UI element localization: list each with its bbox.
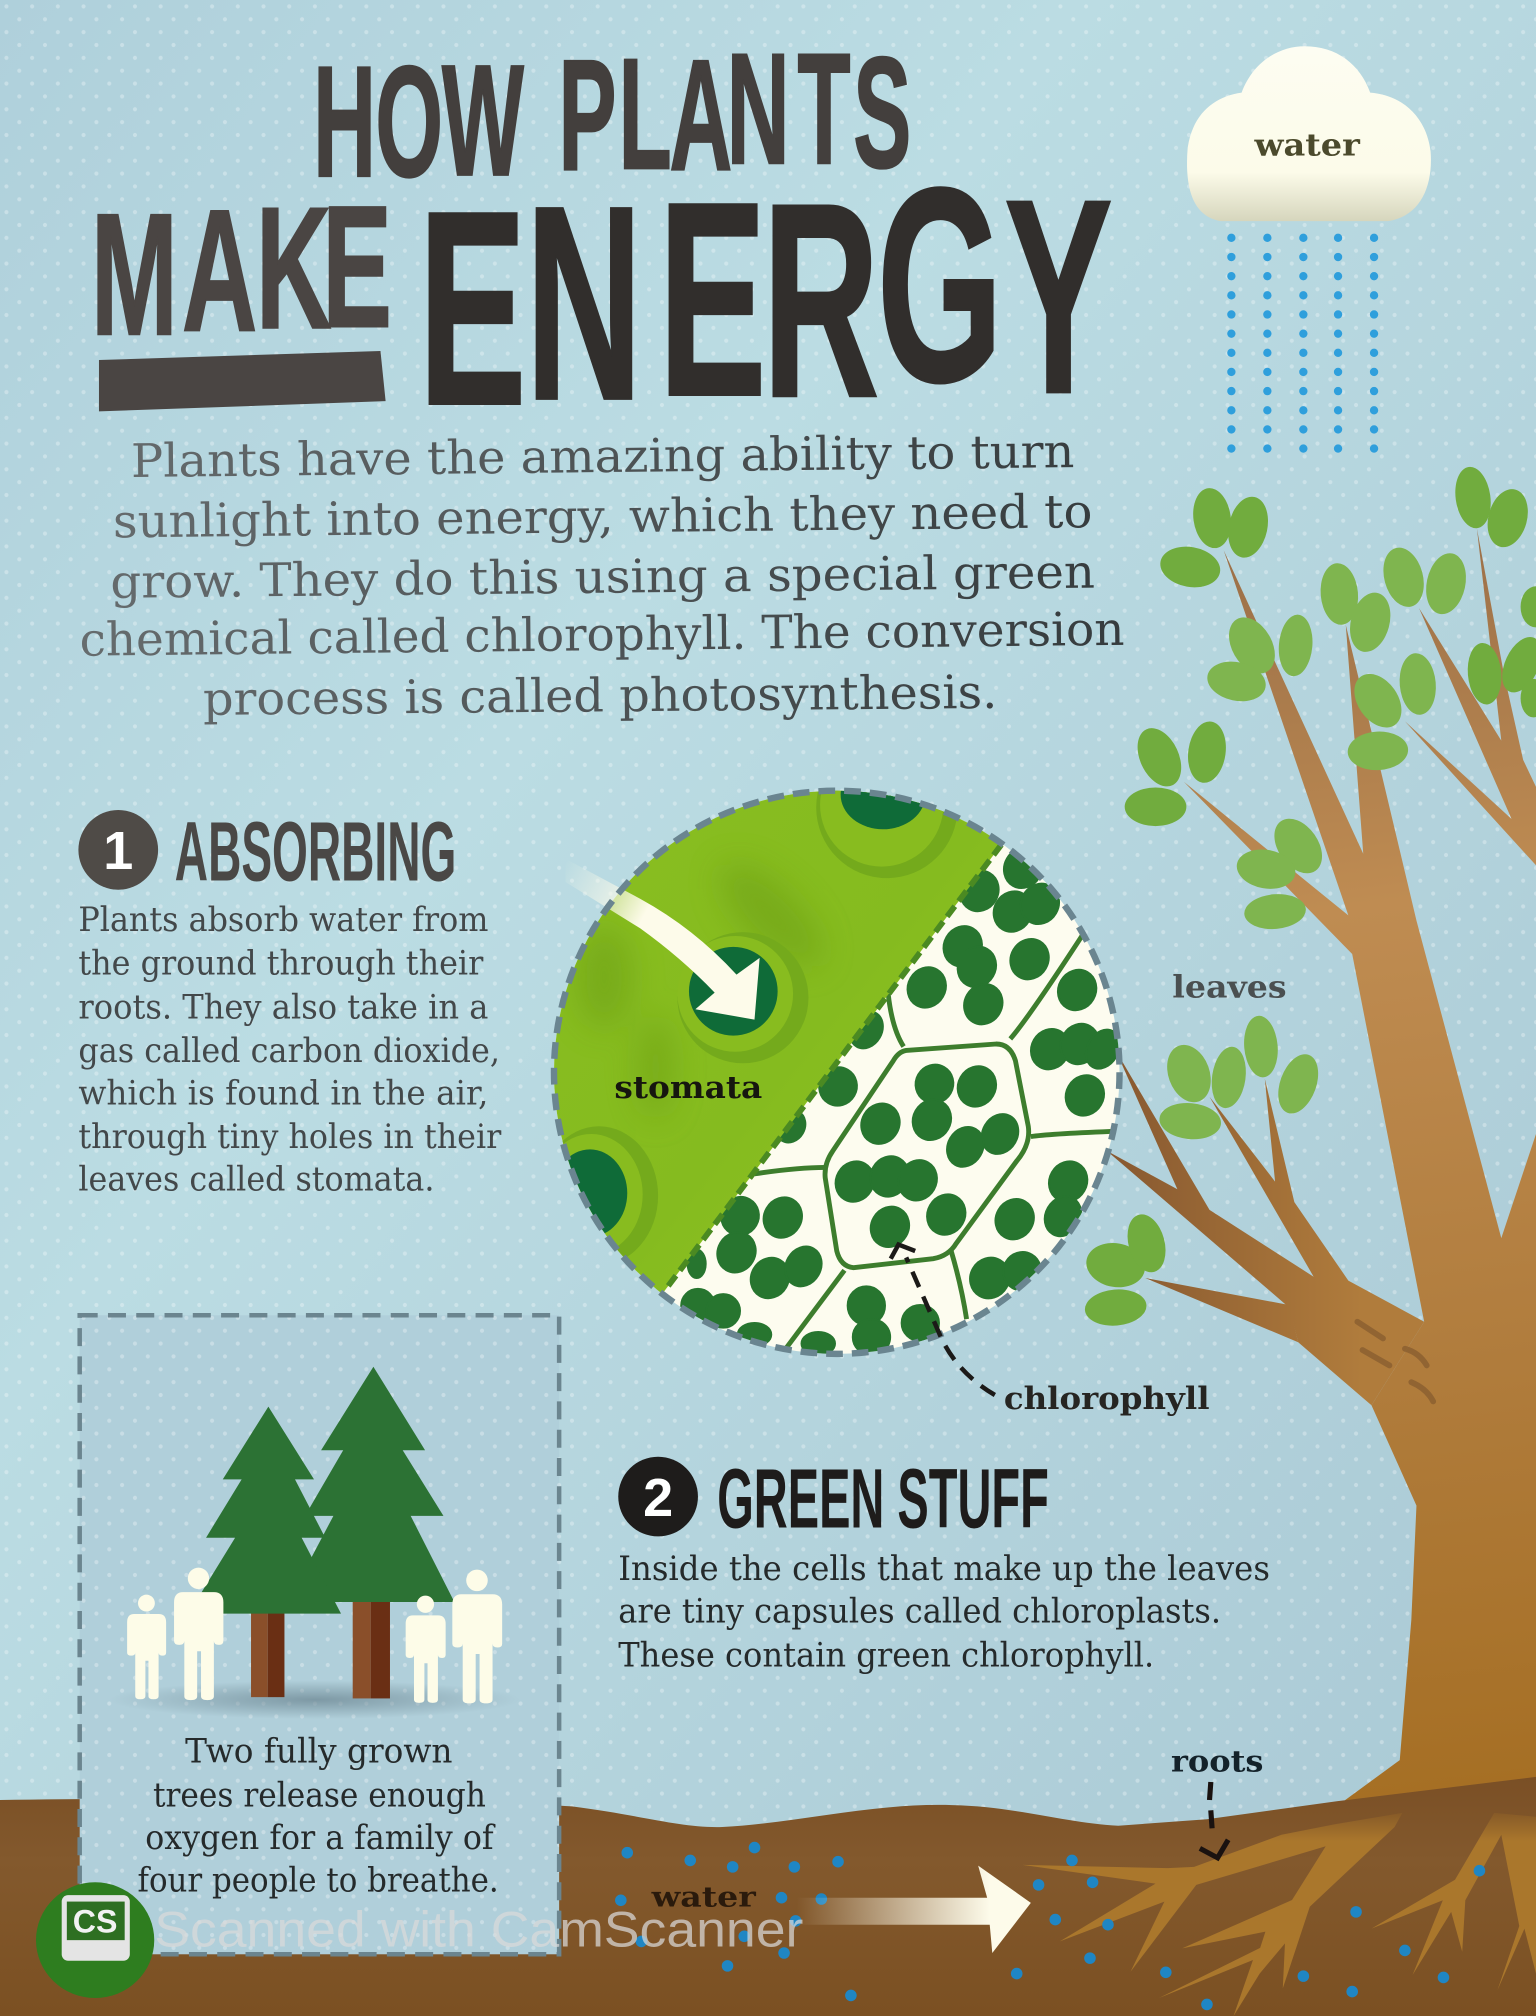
label: roots: roots xyxy=(1171,1744,1264,1779)
absorbing text block xyxy=(78,900,501,1199)
icon: right pine tree xyxy=(288,1367,454,1698)
CamScanner watermark: CS xyxy=(73,1903,117,1939)
intro paragraph: chemical called chlorophyll. The conversion xyxy=(79,602,1125,667)
green stuff text block xyxy=(618,1549,1270,1674)
ground shadow xyxy=(109,1680,521,1719)
heading 2: green stuff: GREEN STUFF xyxy=(717,1450,1049,1545)
green stuff text block: are tiny capsules called chloroplasts. xyxy=(618,1592,1221,1631)
CamScanner watermark xyxy=(36,1882,803,1998)
heading 2: green stuff: 2 xyxy=(643,1468,673,1528)
absorbing text block: gas called carbon dioxide, xyxy=(78,1031,500,1070)
arrow: roots pointer xyxy=(1200,1782,1228,1858)
absorbing text block: the ground through their xyxy=(78,944,483,983)
arrow: water flow to roots xyxy=(797,1866,1031,1953)
title: HOW PLANTS xyxy=(313,21,911,211)
green stuff text block: These contain green chlorophyll. xyxy=(618,1635,1154,1674)
heading 1: absorbing: 1 xyxy=(103,821,133,881)
tree trunk and branches xyxy=(1107,528,1536,1832)
label: leaves: leaves xyxy=(1172,970,1287,1006)
absorbing text block: through tiny holes in their xyxy=(78,1117,501,1156)
icon: family of four xyxy=(127,1568,502,1703)
title underline bar xyxy=(99,351,386,411)
cell layer xyxy=(553,791,1126,1356)
heading 1: absorbing xyxy=(78,804,456,899)
fact text: four people to breathe. xyxy=(138,1860,499,1899)
label: water in soil: water xyxy=(651,1880,757,1914)
absorbing text block: roots. They also take in a xyxy=(78,987,488,1026)
label: stomata: stomata xyxy=(614,1070,762,1106)
green stuff text block: Inside the cells that make up the leaves xyxy=(618,1549,1270,1588)
bark marks xyxy=(1357,1322,1433,1401)
lens dashed outline xyxy=(554,791,1120,1354)
intro paragraph: sunlight into energy, which they need to xyxy=(113,484,1093,548)
arrow: chlorophyll pointer xyxy=(891,1245,995,1395)
absorbing text block: Plants absorb water from xyxy=(78,900,488,939)
fact text xyxy=(138,1732,499,1899)
icon: left pine tree xyxy=(188,1407,341,1697)
rain drops xyxy=(1231,238,1374,453)
divider dashes between surface and cells xyxy=(665,845,1001,1291)
fact text: Two fully grown xyxy=(185,1732,452,1771)
absorbing text block: leaves called stomata. xyxy=(78,1160,434,1199)
fact text: trees release enough xyxy=(153,1775,486,1814)
heading 1: absorbing: ABSORBING xyxy=(175,804,456,899)
cloud with water label xyxy=(1187,46,1431,221)
tree leaves xyxy=(1083,465,1536,1328)
green leaf surface xyxy=(554,790,998,1292)
fact text: oxygen for a family of xyxy=(145,1818,496,1857)
intro paragraph xyxy=(79,424,1125,726)
absorbing text block: which is found in the air, xyxy=(78,1073,488,1112)
ground soil xyxy=(0,1777,1536,2016)
panel: oxygen fact box xyxy=(80,1315,559,1954)
intro paragraph: grow. They do this using a special green xyxy=(110,545,1095,609)
cell walls xyxy=(755,933,1111,1347)
title xyxy=(91,21,1112,462)
label: chlorophyll: chlorophyll xyxy=(1004,1381,1210,1417)
CamScanner watermark: Scanned with CamScanner xyxy=(154,1902,803,1958)
panel: magnified leaf lens xyxy=(550,788,1123,1358)
intro paragraph: process is called photosynthesis. xyxy=(203,665,998,726)
arrow: into stomata xyxy=(566,859,760,1020)
water dots in soil xyxy=(615,1842,1485,2010)
chloroplasts xyxy=(681,841,1126,1355)
heading 2: green stuff xyxy=(618,1450,1049,1545)
intro paragraph: Plants have the amazing ability to turn xyxy=(131,424,1075,488)
tree roots xyxy=(1023,1813,1536,2016)
title: ENERGY xyxy=(419,130,1112,462)
cloud with water label: water xyxy=(1253,128,1361,164)
title: MAKE xyxy=(91,170,392,372)
